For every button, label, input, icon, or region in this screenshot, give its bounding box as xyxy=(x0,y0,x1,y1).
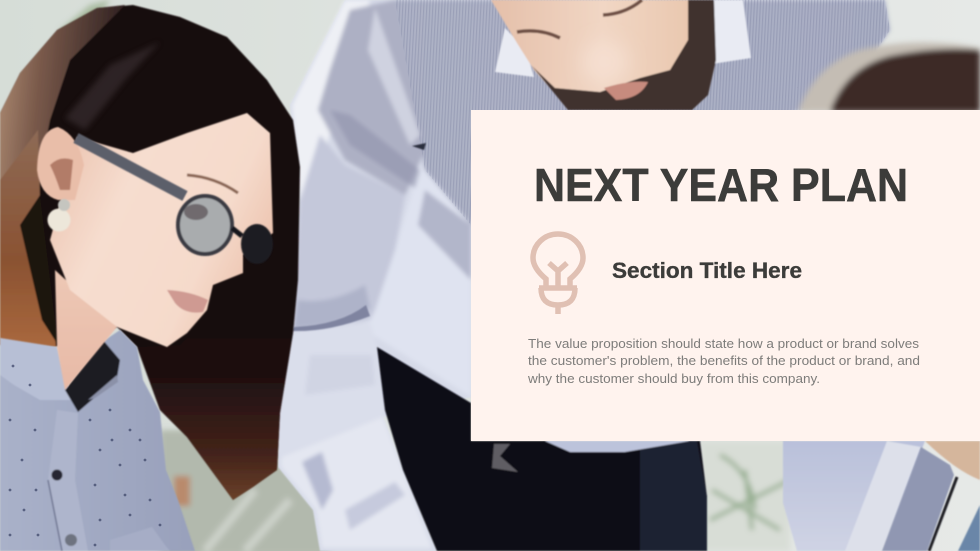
woman: hair sheen xyxy=(65,42,160,130)
section heading: Section Title Here xyxy=(612,258,802,283)
woman: hair xyxy=(0,5,300,500)
body text: the customer's problem, the benefits of the product or brand, and xyxy=(528,353,920,368)
collar xyxy=(0,338,72,400)
upper arm xyxy=(292,135,405,330)
woman: shirt xyxy=(0,330,195,551)
upper body xyxy=(395,0,890,225)
left strands xyxy=(0,130,56,347)
sleeve highlight xyxy=(292,0,370,330)
woman: pearl earring xyxy=(48,199,70,232)
icon: light bulb xyxy=(533,234,583,314)
man: dark trousers xyxy=(377,347,707,551)
placket xyxy=(48,410,88,551)
man: right sleeve xyxy=(783,441,925,551)
torso below the shoulder xyxy=(362,165,471,397)
woman: glasses xyxy=(76,138,273,264)
left collar xyxy=(495,28,534,77)
third person: blurred hair xyxy=(798,42,980,112)
crown xyxy=(0,5,300,500)
eyebrow xyxy=(187,175,238,193)
shirt base silhouette xyxy=(278,0,890,551)
pocket xyxy=(110,527,170,551)
man: face and beard xyxy=(491,0,751,110)
title: NEXT YEAR PLAN xyxy=(534,159,908,211)
beard xyxy=(532,0,716,110)
man: shirt xyxy=(278,0,890,551)
lips xyxy=(167,290,208,313)
body text: The value proposition should state how a product or brand solves xyxy=(528,336,920,351)
woman: shirt dots xyxy=(9,365,161,546)
long lower lock xyxy=(137,270,298,500)
laptop xyxy=(882,441,980,551)
cuff xyxy=(281,417,432,548)
shoulder fold xyxy=(318,0,425,195)
woman: face and neck xyxy=(37,113,273,390)
body text: why the customer should buy from this company. xyxy=(527,371,820,386)
blurred background: office and plant xyxy=(60,0,790,551)
ear xyxy=(37,127,84,200)
panel: next year plan xyxy=(471,110,980,441)
body text xyxy=(527,336,920,386)
forearm xyxy=(278,322,385,457)
right collar xyxy=(712,0,751,64)
